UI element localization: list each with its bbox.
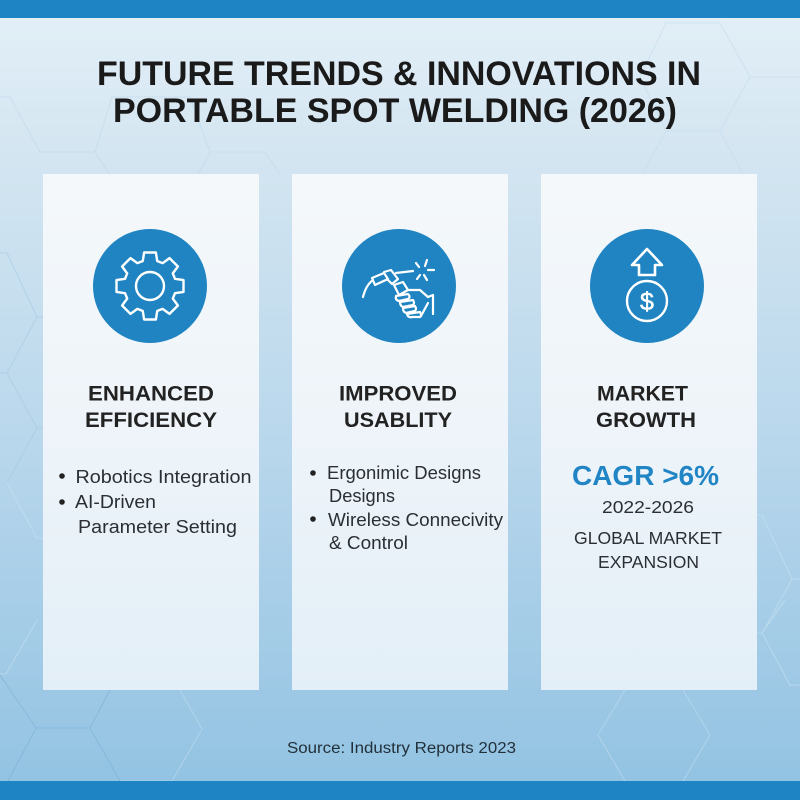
card background xyxy=(292,174,508,690)
icon: arrow and dollar coin xyxy=(590,229,704,343)
panel: improved usability xyxy=(292,174,508,690)
heading: GROWTH xyxy=(596,409,696,432)
date range: 2022-2026 xyxy=(602,497,694,517)
caption: EXPANSION xyxy=(598,552,699,572)
top bar xyxy=(0,0,800,18)
heading: IMPROVED xyxy=(339,382,457,406)
bullet list: Wireless Connecivity xyxy=(328,509,504,530)
caption xyxy=(574,528,722,572)
panel: enhanced efficiency xyxy=(43,174,259,690)
icon: gear xyxy=(93,229,207,343)
card background xyxy=(541,174,757,690)
source note: Source: Industry Reports 2023 xyxy=(287,740,516,757)
bullet list xyxy=(59,466,252,537)
heading xyxy=(339,382,457,432)
title xyxy=(97,55,701,130)
heading: EFFICIENCY xyxy=(85,409,217,432)
bullet list: AI-Driven xyxy=(75,491,156,512)
bullet list: Ergonimic Designs xyxy=(327,462,481,483)
panel: market growth xyxy=(541,174,757,690)
caption: GLOBAL MARKET xyxy=(574,528,722,548)
bullet list: & Control xyxy=(329,532,408,553)
bullet list: Parameter Setting xyxy=(78,516,237,537)
heading xyxy=(85,382,217,432)
icon: arrow and dollar coin: $ xyxy=(640,288,654,316)
heading: USABLITY xyxy=(344,409,452,432)
bullet list: Robotics Integration xyxy=(76,466,252,487)
heading: MARKET xyxy=(597,382,688,406)
statistic: CAGR: CAGR >6% xyxy=(572,460,719,491)
card background xyxy=(43,174,259,690)
heading xyxy=(596,382,696,432)
bullet list: Designs xyxy=(329,485,395,506)
title: FUTURE TRENDS & INNOVATIONS IN xyxy=(97,55,701,93)
bullet list xyxy=(310,462,504,553)
bottom bar xyxy=(0,781,800,800)
icon: welding torch in hand xyxy=(342,229,456,343)
heading: ENHANCED xyxy=(88,382,214,406)
title: PORTABLE SPOT WELDING (2026) xyxy=(113,92,677,130)
